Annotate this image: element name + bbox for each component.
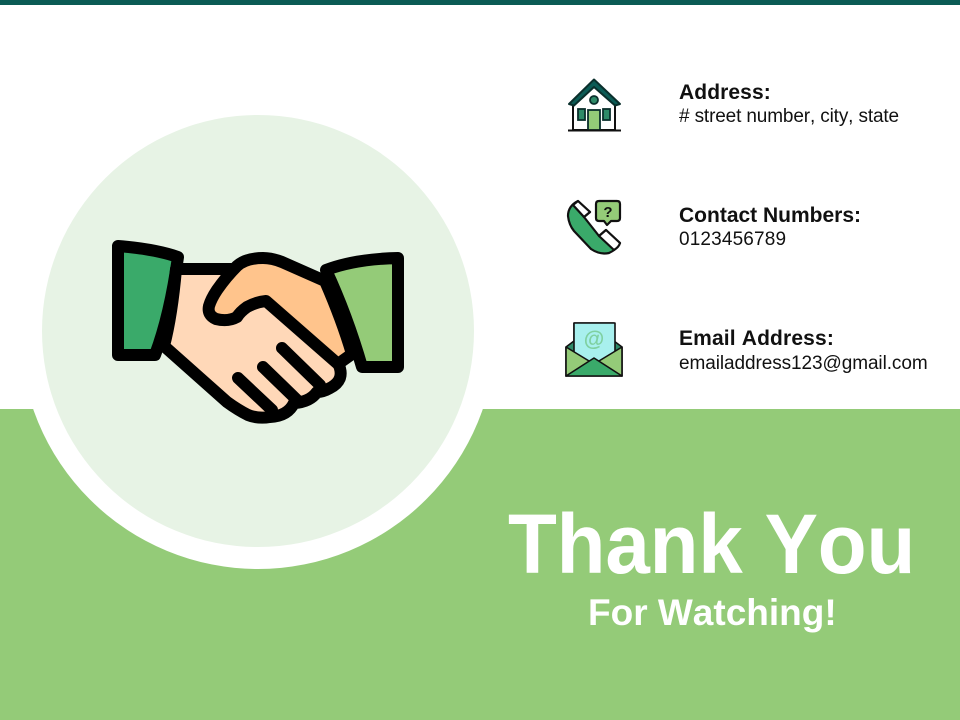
round window (590, 96, 598, 104)
email text: emailaddress123@gmail.com (679, 353, 928, 374)
left cuff (118, 246, 178, 355)
windows (578, 109, 585, 120)
white circle ring (20, 93, 496, 569)
green lower panel (0, 409, 960, 720)
question bubble (596, 201, 620, 225)
orange hand (209, 258, 352, 364)
icon: house (568, 78, 621, 132)
front flap (566, 358, 622, 376)
top bar (0, 0, 960, 5)
address text: # street number, city, state (679, 106, 899, 127)
earpieces (573, 201, 590, 217)
contact text: 0123456789 (679, 229, 786, 250)
left flap (566, 347, 594, 376)
right flap (594, 347, 622, 376)
contact heading: Contact Numbers: (679, 204, 861, 227)
email heading: Email Address: (679, 327, 834, 350)
handset (568, 201, 620, 254)
address heading: Address: (679, 81, 771, 104)
icon: phone with question bubble (566, 200, 622, 255)
envelope back (566, 323, 622, 376)
icon: envelope (565, 322, 623, 377)
pale green circle (42, 115, 474, 547)
house body (573, 84, 615, 130)
letter (574, 323, 615, 365)
door (588, 110, 600, 130)
roof (569, 80, 620, 106)
question mark: ? (603, 204, 613, 221)
light hand (164, 269, 341, 418)
right cuff (326, 258, 398, 367)
at sign: @ (584, 328, 604, 351)
title: Thank You (508, 497, 915, 591)
subtitle: For Watching! (588, 592, 837, 633)
finger lines (238, 348, 320, 410)
ground (568, 130, 621, 132)
